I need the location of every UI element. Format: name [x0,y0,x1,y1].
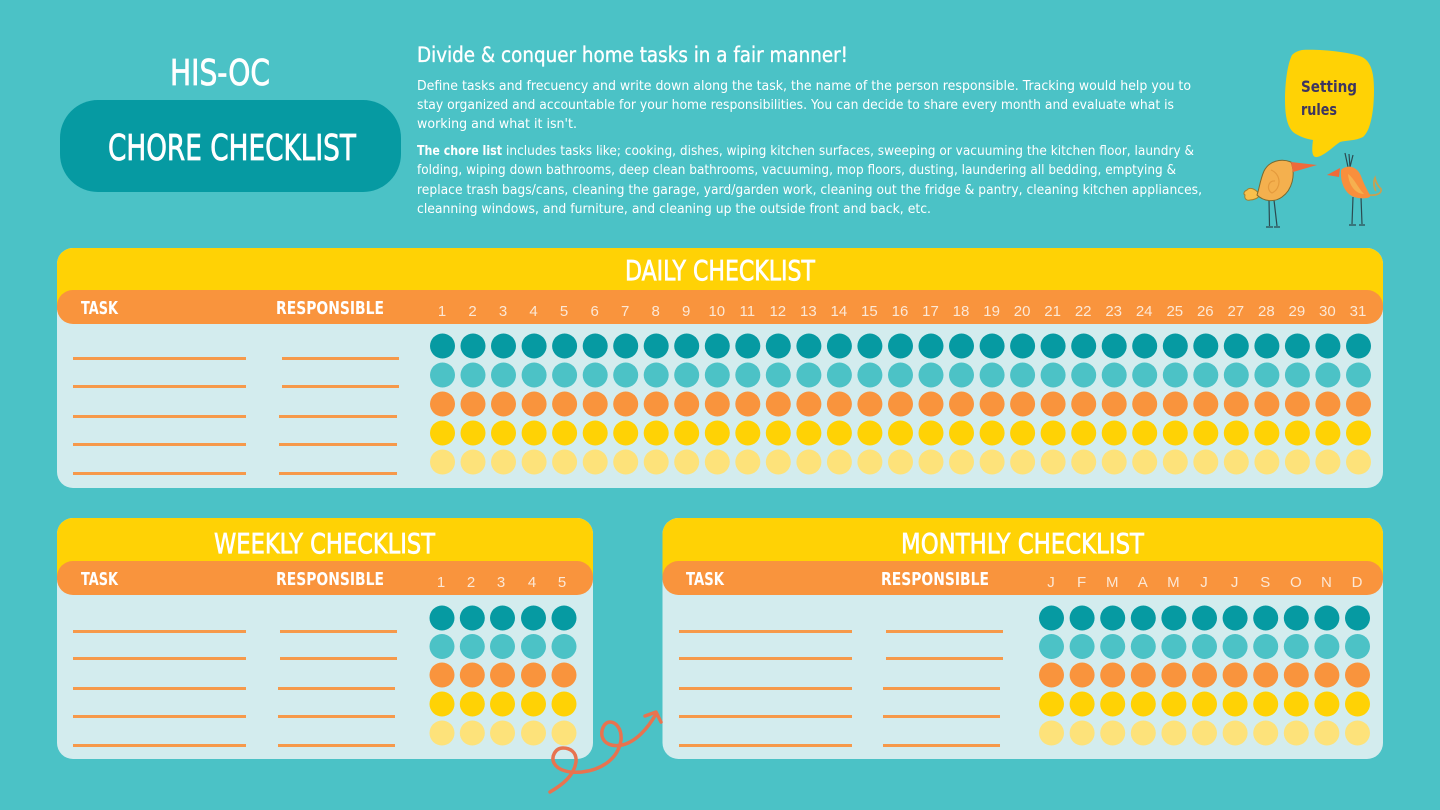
title pill: chore checklist: CHORE CHECKLIST [108,128,357,169]
daily tracking dots [430,334,1371,474]
daily orange column bar: 8 [652,303,660,320]
daily orange column bar: 26 [1197,303,1214,320]
daily orange column bar: 30 [1319,303,1336,320]
daily orange column bar: 7 [621,303,629,320]
daily orange column bar: 11 [740,303,755,320]
panel: monthly checklist [662,518,1383,759]
intro paragraph: working and what it isn't. [417,117,577,132]
chore list paragraph: cleanning windows, and furniture, and cleaning up the outside front and back, etc. [417,202,931,217]
speech bubble: setting rules: Setting [1301,77,1357,96]
daily orange column bar: 21 [1044,303,1061,320]
daily orange column bar: 17 [922,303,939,320]
weekly orange column bar: 2 [467,574,475,591]
daily orange column bar: RESPONSIBLE [276,298,384,319]
daily orange column bar [57,290,1383,324]
daily orange column bar: 5 [560,303,568,320]
weekly orange column bar: RESPONSIBLE [276,569,384,590]
speech bubble: setting rules: rules [1301,100,1337,119]
daily orange column bar: 19 [983,303,1000,320]
weekly orange column bar: TASK [81,569,119,590]
monthly orange column bar: O [1290,574,1302,591]
chore list paragraph: replace trash bags/cans, cleaning the garage, yard/garden work, cleaning out the fridge & pantry, cleaning kitchen appliances, [417,183,1202,198]
monthly orange column bar: S [1260,574,1270,591]
daily writing lines [73,358,399,474]
weekly orange column bar: 4 [528,574,536,591]
daily orange column bar: 6 [591,303,599,320]
weekly writing lines [73,632,397,746]
monthly tracking dots [1039,606,1370,746]
daily orange column bar: 12 [769,303,786,320]
panel: daily checklist [57,248,1383,488]
monthly orange column bar [662,561,1383,595]
intro heading: Divide & conquer home tasks in a fair manner! [417,43,848,67]
weekly orange column bar [57,561,593,595]
arrow: curly connector from weekly to monthly [550,712,661,792]
daily orange column bar: 27 [1227,303,1244,320]
title pill: chore checklist [60,100,401,192]
daily orange column bar: 1 [438,303,446,320]
monthly yellow header: MONTHLY CHECKLIST [901,527,1145,560]
daily orange column bar: 28 [1258,303,1275,320]
monthly writing lines [679,632,1003,746]
chore list paragraph [417,144,1202,217]
daily orange column bar: 16 [892,303,908,320]
daily orange column bar: TASK [81,298,119,319]
monthly orange column bar: N [1321,574,1332,591]
icon: left bird [1244,160,1317,227]
daily orange column bar: 23 [1105,303,1122,320]
daily orange column bar: 4 [529,303,538,320]
monthly orange column bar: M [1167,574,1180,591]
monthly orange column bar: D [1352,574,1363,591]
monthly orange column bar: J [1200,574,1208,591]
daily orange column bar: 24 [1136,303,1153,320]
monthly orange column bar: F [1077,574,1086,591]
panel: weekly checklist [57,518,593,759]
intro text block [417,43,1202,217]
monthly orange column bar: RESPONSIBLE [881,569,989,590]
weekly orange column bar: 5 [558,574,566,591]
daily orange column bar: 20 [1014,303,1030,320]
daily orange column bar: 3 [499,303,507,320]
daily orange column bar: 15 [861,303,878,320]
weekly orange column bar: 3 [497,574,505,591]
daily orange column bar: 13 [800,303,817,320]
intro paragraph: stay organized and accountable for your home responsibilities. You can decide to share every month and evaluate what is [417,98,1174,113]
monthly orange column bar: J [1047,574,1055,591]
daily orange column bar: 18 [953,303,969,320]
daily orange column bar: 25 [1166,303,1183,320]
chore list paragraph: includes tasks like; cooking, dishes, wiping kitchen surfaces, sweeping or vacuuming the kitchen floor, laundry & [506,144,1194,159]
daily yellow header [57,248,1383,310]
icon: right bird [1327,153,1381,225]
daily orange column bar: 2 [468,303,477,320]
intro paragraph: Define tasks and frecuency and write down along the task, the name of the person responsible. Tracking would help you to [417,79,1191,94]
monthly orange column bar: A [1138,574,1148,591]
daily orange column bar: 10 [708,303,725,320]
daily orange column bar: 31 [1350,303,1366,320]
monthly yellow header [662,518,1383,580]
chore list paragraph: folding, wiping down bathrooms, deep clean bathrooms, vacuuming, mop floors, dusting, laundering all bedding, emptying & [417,163,1176,178]
daily orange column bar: 14 [831,303,847,320]
weekly yellow header [57,518,593,580]
speech bubble: setting rules [1285,50,1374,157]
daily yellow header: DAILY CHECKLIST [625,254,816,287]
weekly orange column bar: 1 [437,574,445,591]
weekly yellow header: WEEKLY CHECKLIST [214,527,436,560]
monthly orange column bar: J [1231,574,1238,591]
daily orange column bar: 29 [1289,303,1305,320]
daily orange column bar: 22 [1075,303,1092,320]
title: HIS-OC: HIS-OC [170,53,270,94]
monthly orange column bar: M [1106,574,1118,591]
monthly orange column bar: TASK [686,569,725,590]
intro paragraph [417,79,1191,132]
daily orange column bar: 9 [682,303,690,320]
weekly tracking dots [430,606,576,746]
chore list paragraph: The chore list [417,144,502,159]
